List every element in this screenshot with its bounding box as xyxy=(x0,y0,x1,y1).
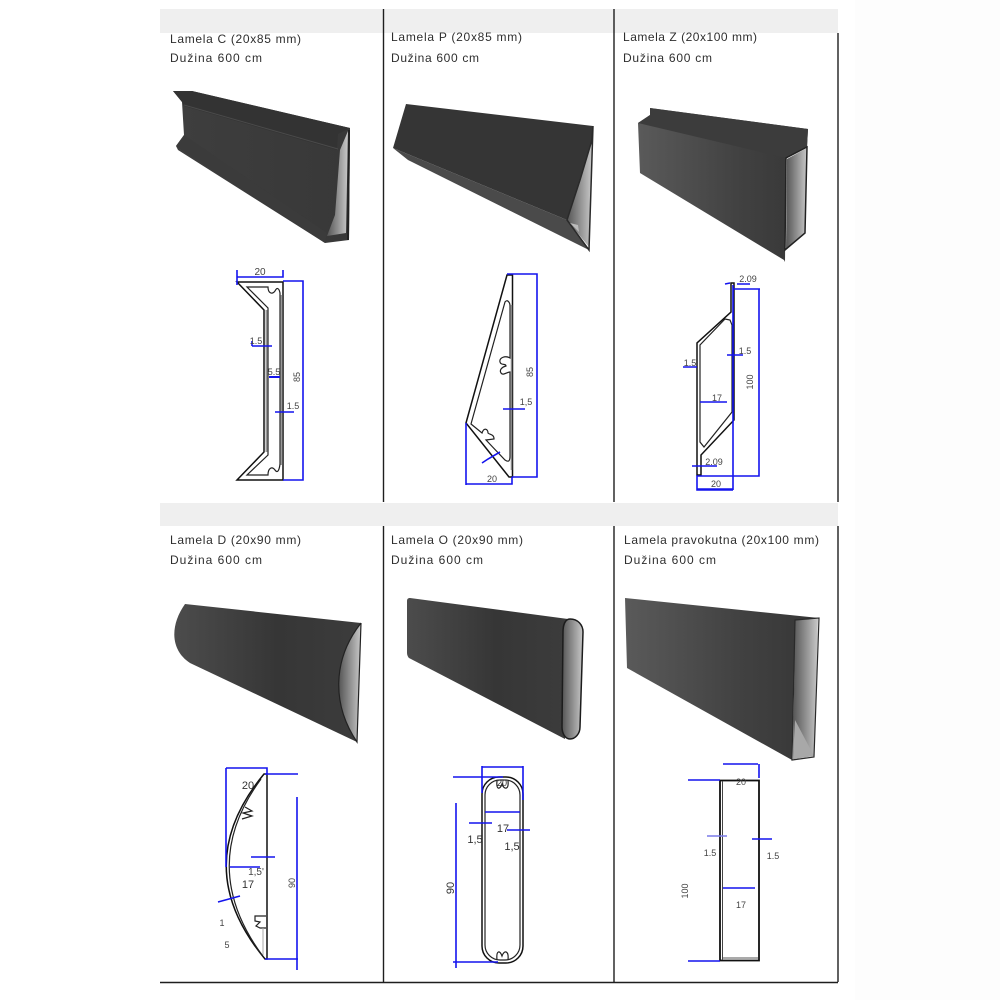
dimensions: Lamela C: 85 xyxy=(292,372,302,382)
heading: Lamela P xyxy=(391,30,522,65)
dimensions: Lamela P: 85 xyxy=(525,367,535,377)
header band: top row xyxy=(160,9,838,33)
heading: Lamela C xyxy=(170,32,301,65)
dimensions: Lamela C: 1.5 xyxy=(287,401,299,411)
3D render: Lamela Z xyxy=(638,108,808,262)
dimensions: Lamela D: 90 xyxy=(287,878,297,888)
dimensions: Lamela Z: 100 xyxy=(745,374,755,390)
cross-section drawing: Lamela C xyxy=(237,282,283,480)
dimensions: Lamela D: 1 xyxy=(219,918,225,928)
heading: Lamela pravokutna: Lamela pravokutna (20x100 mm) xyxy=(624,533,819,547)
dimensions: Lamela D: 1,5' xyxy=(248,867,264,878)
header band: bottom row xyxy=(160,503,838,526)
panel: Lamela C xyxy=(170,32,350,480)
dimensions: Lamela O: 20 xyxy=(497,778,507,788)
heading: Lamela D xyxy=(170,533,301,567)
dimensions: Lamela pravokutna: 17 xyxy=(736,900,746,910)
dimensions: Lamela P: 1,5 xyxy=(520,397,532,407)
heading: Lamela O: Lamela O (20x90 mm) xyxy=(391,533,523,547)
dimensions: Lamela P xyxy=(466,274,537,485)
dimensions: Lamela D: 5 xyxy=(224,940,230,950)
cross-section drawing: Lamela P xyxy=(466,275,512,477)
dimensions: Lamela C: 20 xyxy=(254,267,266,278)
dimensions: Lamela O: 1,5 xyxy=(504,841,520,853)
cross-section drawing: Lamela pravokutna xyxy=(720,780,759,960)
panel: Lamela pravokutna xyxy=(624,533,819,961)
cross-section drawing: Lamela O xyxy=(482,777,523,963)
panel: Lamela Z xyxy=(623,30,808,490)
3D render: Lamela P xyxy=(393,104,593,250)
heading: Lamela O: Dužina 600 cm xyxy=(391,553,483,567)
heading: Lamela C: Lamela C (20x85 mm) xyxy=(170,32,301,46)
panel: Lamela D xyxy=(170,533,361,970)
panel: Lamela P xyxy=(391,30,593,485)
dimensions: Lamela Z: 17 xyxy=(712,393,722,403)
dimensions: Lamela pravokutna: 20 xyxy=(736,777,746,787)
cross-section drawing: Lamela Z xyxy=(697,283,734,475)
dimensions: Lamela pravokutna: 100 xyxy=(680,883,690,899)
dimensions: Lamela D xyxy=(218,768,298,970)
heading: Lamela pravokutna: Dužina 600 cm xyxy=(624,553,716,567)
panel: Lamela O xyxy=(391,533,583,968)
heading: Lamela D: Lamela D (20x90 mm) xyxy=(170,533,301,547)
dimensions: Lamela pravokutna: 1.5 xyxy=(767,851,779,861)
dimensions: Lamela C: 5.5 xyxy=(268,367,280,377)
dimensions: Lamela D: 17 xyxy=(242,879,254,891)
dimensions: Lamela Z: 20 xyxy=(711,479,721,489)
3D render: Lamela D xyxy=(174,604,361,742)
dimensions: Lamela Z: 1.5 xyxy=(739,346,751,356)
dimensions: Lamela Z: 1.5 xyxy=(684,358,696,368)
dimensions: Lamela C xyxy=(237,267,303,480)
heading: Lamela pravokutna xyxy=(624,533,819,567)
3D render: Lamela C xyxy=(173,91,350,243)
heading: Lamela P: Lamela P (20x85 mm) xyxy=(391,30,522,44)
heading: Lamela Z: Dužina 600 cm xyxy=(623,51,712,65)
dimensions: Lamela pravokutna: 1.5 xyxy=(704,848,716,858)
cross-section drawing: Lamela D xyxy=(226,774,267,959)
dimensions: Lamela O xyxy=(445,766,530,968)
heading: Lamela D: Dužina 600 cm xyxy=(170,553,262,567)
dimensions: Lamela pravokutna xyxy=(680,764,779,961)
heading: Lamela Z xyxy=(623,30,757,65)
dimensions: Lamela C: 1.5 xyxy=(250,336,262,346)
dimensions: Lamela Z: 2.09 xyxy=(705,457,723,467)
dimensions: Lamela O: 90 xyxy=(445,882,457,894)
dimensions: Lamela O: 17 xyxy=(497,823,509,835)
dimensions: Lamela Z: 2.09 xyxy=(739,274,757,284)
dimensions: Lamela Z xyxy=(683,274,760,490)
dimensions: Lamela D: 20 xyxy=(242,780,254,792)
dimensions: Lamela O: 1,5 xyxy=(467,834,483,846)
dimensions: Lamela P: 20 xyxy=(487,474,497,484)
heading: Lamela C: Dužina 600 cm xyxy=(170,51,262,65)
3D render: Lamela pravokutna xyxy=(625,598,819,760)
heading: Lamela Z: Lamela Z (20x100 mm) xyxy=(623,30,757,44)
3D render: Lamela O xyxy=(407,598,583,739)
heading: Lamela P: Dužina 600 cm xyxy=(391,51,479,65)
heading: Lamela O xyxy=(391,533,523,567)
